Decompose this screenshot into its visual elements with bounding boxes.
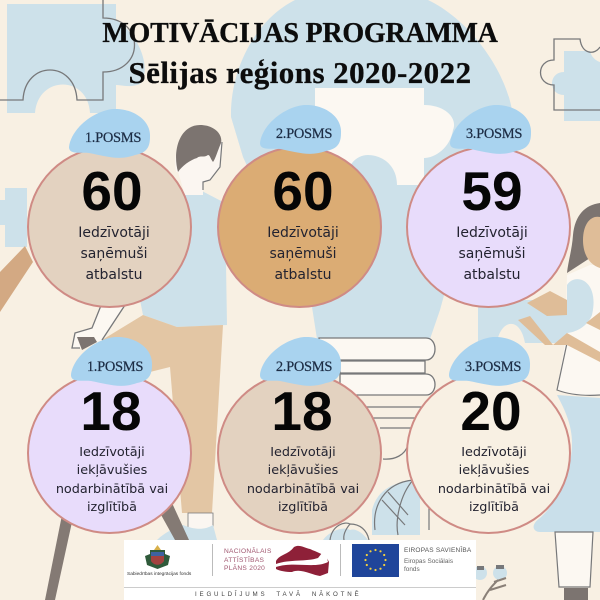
description: Iedzīvotāji <box>267 225 339 241</box>
badge <box>450 105 531 154</box>
badge <box>71 337 152 386</box>
description <box>78 225 150 283</box>
person left: legs <box>90 315 223 513</box>
puzzle piece: top left <box>0 0 145 113</box>
badge label: 3.POSMS <box>465 359 521 375</box>
description: iekļāvušies <box>77 463 147 478</box>
description: iekļāvušies <box>268 463 338 478</box>
badge <box>260 105 341 154</box>
description <box>247 445 359 515</box>
description <box>56 445 168 515</box>
person left: torso <box>140 190 227 327</box>
title: Sēlijas reģions 2020-2022 <box>128 55 472 90</box>
description: Iedzīvotāji <box>456 225 528 241</box>
number: 60 <box>81 160 143 222</box>
sprig <box>473 565 507 600</box>
number: 20 <box>460 380 522 442</box>
description: atbalstu <box>274 267 332 283</box>
logo footer <box>124 540 476 600</box>
puzzle piece: left <box>0 188 27 247</box>
person right: shirt, hair, face <box>557 203 600 395</box>
logo: national plan: NACIONĀLAIS <box>224 548 272 555</box>
description: Iedzīvotāji <box>270 445 336 460</box>
circle: bottom 1 <box>27 337 192 534</box>
description: nodarbinātībā vai <box>56 482 168 497</box>
badge <box>449 337 530 386</box>
description <box>438 445 550 515</box>
badge label: 2.POSMS <box>276 359 332 375</box>
badge label: 3.POSMS <box>466 126 522 142</box>
logo text: Sabiedrības integrācijas fonds <box>127 572 191 577</box>
description: Iedzīvotāji <box>78 225 150 241</box>
person left: socks <box>188 513 213 530</box>
title: MOTIVĀCIJAS PROGRAMMA <box>102 18 498 49</box>
description: Iedzīvotāji <box>79 445 145 460</box>
logo text: EU: EIROPAS SAVIENĪBA <box>404 547 471 554</box>
number: 18 <box>80 380 142 442</box>
circle: bottom 2 <box>217 337 382 534</box>
person left: shoe <box>157 525 217 540</box>
description <box>267 225 339 283</box>
puzzle piece: right <box>478 279 594 343</box>
description: saņēmuši <box>458 246 526 262</box>
description: izglītībā <box>469 500 519 515</box>
person left: arm <box>0 246 33 312</box>
description: saņēmuši <box>80 246 148 262</box>
leaves <box>323 480 429 540</box>
description: iekļāvušies <box>459 463 529 478</box>
circle: top 2 <box>217 105 382 308</box>
circle: bottom 3 <box>406 337 571 534</box>
arch cut-out <box>315 88 454 190</box>
big blue arch <box>231 0 512 339</box>
number: 18 <box>271 380 333 442</box>
badge <box>260 337 341 386</box>
circle: top 3 <box>406 105 571 308</box>
badge <box>69 109 150 158</box>
description: izglītībā <box>278 500 328 515</box>
description: izglītībā <box>87 500 137 515</box>
icon: EU flag <box>352 544 399 577</box>
number: 60 <box>272 160 334 222</box>
puzzle piece: top right <box>540 39 600 121</box>
circle: top 1 <box>27 109 192 308</box>
badge label: 2.POSMS <box>276 126 332 142</box>
badge label: 1.POSMS <box>85 130 141 146</box>
logo: national plan: ATTĪSTĪBAS <box>224 556 264 564</box>
logo: national plan: PLĀNS 2020 <box>224 565 265 572</box>
person left: head <box>175 125 222 195</box>
badge label: 1.POSMS <box>87 359 143 375</box>
description: atbalstu <box>463 267 521 283</box>
person right: arms and skirt <box>518 291 600 600</box>
description: atbalstu <box>85 267 143 283</box>
logo: Latvian coat of arms <box>145 545 170 569</box>
icon: Latvia map <box>276 546 329 576</box>
description: nodarbinātībā vai <box>438 482 550 497</box>
description: saņēmuši <box>269 246 337 262</box>
description <box>456 225 528 283</box>
logo: national plan <box>224 548 272 572</box>
stacked books <box>319 338 435 459</box>
frame left <box>45 302 189 600</box>
logo footer: fonds <box>404 566 420 573</box>
description: nodarbinātībā vai <box>247 482 359 497</box>
title <box>102 18 498 90</box>
slogan: IEGULDĪJUMS TAVĀ NĀKOTNĒ <box>195 591 361 598</box>
number: 59 <box>461 160 523 222</box>
description: Iedzīvotāji <box>461 445 527 460</box>
logo footer: Eiropas Sociālais <box>404 558 453 565</box>
